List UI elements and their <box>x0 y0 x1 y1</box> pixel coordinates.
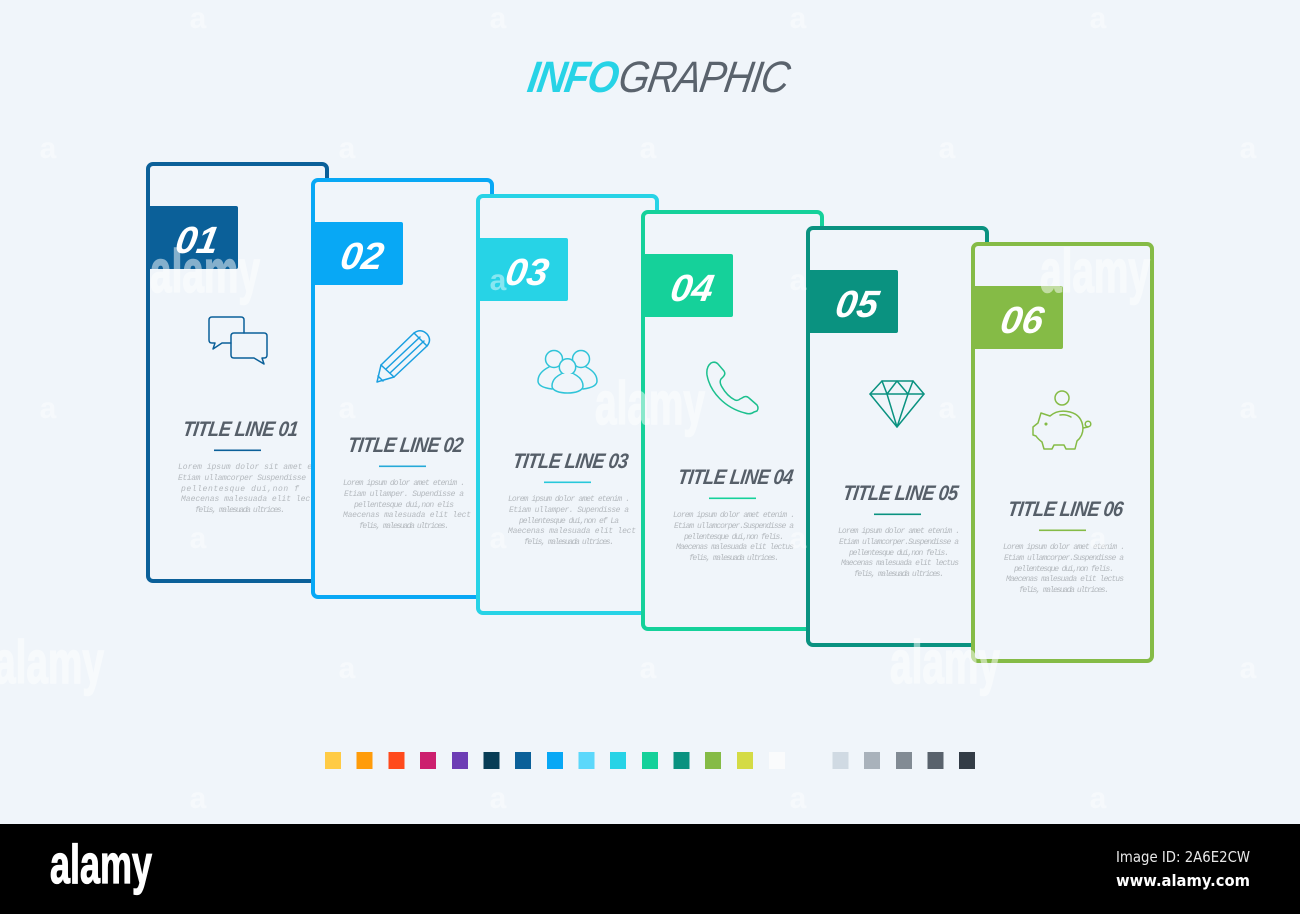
body text 04: pellentesque dui,non felis. <box>683 533 784 542</box>
watermarks: alamy <box>1040 238 1150 305</box>
number badge 04: 04 <box>667 267 717 310</box>
body text 06: felis, malesuada ultrices. <box>1019 586 1109 595</box>
panel: card 06 <box>971 244 1152 661</box>
body text 02: pellentesque dui,non elis <box>353 501 454 510</box>
divider 03 <box>544 482 591 483</box>
number badge 06 <box>971 286 1063 349</box>
icon: piggy bank <box>1033 391 1091 449</box>
watermarks: a <box>1240 392 1257 425</box>
colour palette swatches <box>325 752 975 769</box>
heading: title line 05: TITLE LINE 05 <box>841 482 961 505</box>
icon: pencil <box>377 331 430 382</box>
watermarks: alamy <box>150 238 260 305</box>
body text 05: Lorem ipsum dolor amet etenim . <box>838 527 960 536</box>
number badge 05: 05 <box>832 283 883 326</box>
watermarks: a <box>339 392 356 425</box>
heading: title line 01: TITLE LINE 01 <box>181 418 299 441</box>
watermarks: a <box>190 522 207 555</box>
watermarks: a <box>790 782 807 815</box>
body text 03: felis, malesuada ultrices. <box>524 538 614 547</box>
body text 01: felis, malesuada ultrices. <box>195 506 285 515</box>
number badge 01 <box>146 206 238 269</box>
body text 03: Lorem ipsum dolor amet etenim . <box>508 495 630 504</box>
divider 02 <box>379 466 426 467</box>
number badge 01: 01 <box>172 219 222 262</box>
watermarks: a <box>40 132 57 165</box>
panel: card 02 <box>311 180 492 597</box>
icon: diamond <box>870 381 924 427</box>
divider 04 <box>709 498 756 499</box>
watermarks: a <box>490 522 507 555</box>
panel: card 05 <box>806 228 987 645</box>
body text 02 <box>343 479 471 531</box>
title <box>525 52 794 101</box>
watermarks: a <box>640 132 657 165</box>
watermarks: a <box>40 392 57 425</box>
title: GRAPHIC <box>616 52 794 101</box>
body text 02: Etiam ullamper. Supendisse a <box>344 490 464 499</box>
watermarks: alamy <box>595 370 705 437</box>
body text 04 <box>673 511 795 563</box>
body text 05: Etiam ullamcorper.Suspendisse a <box>839 538 959 547</box>
number badge 02 <box>311 222 403 285</box>
body text 05 <box>838 527 960 579</box>
watermarks: a <box>190 782 207 815</box>
panel: card 04 <box>641 212 822 629</box>
body text 02: felis, malesuada ultrices. <box>359 522 449 531</box>
watermarks: a <box>339 132 356 165</box>
body text 06: Maecenas malesuada elit lectus <box>1006 575 1124 584</box>
watermarks: a <box>640 652 657 685</box>
body text 05: pellentesque dui,non felis. <box>848 549 949 558</box>
watermarks: a <box>490 782 507 815</box>
watermarks: a <box>490 2 507 35</box>
watermarks: a <box>939 392 956 425</box>
body text 03: Etiam ullamper. Supendisse a <box>509 506 629 515</box>
divider 05 <box>874 514 921 515</box>
heading: title line 02: TITLE LINE 02 <box>346 434 465 457</box>
body text 06: Lorem ipsum dolor amet etenim . <box>1003 543 1125 552</box>
watermarks: a <box>939 132 956 165</box>
footer bar <box>0 824 1300 914</box>
image id: Image ID: 2A6E2CW <box>1116 848 1250 866</box>
watermarks: a <box>790 2 807 35</box>
icon: people <box>538 350 597 393</box>
panel: card 03 <box>476 196 657 613</box>
panel: card 01 <box>146 164 327 581</box>
watermarks: a <box>1240 652 1257 685</box>
body text 06 <box>1003 543 1125 595</box>
body text 03: pellentesque dui,non ef La <box>518 517 619 526</box>
body text 04: Lorem ipsum dolor amet etenim . <box>673 511 795 520</box>
watermarks: alamy <box>890 629 1000 696</box>
heading: title line 06: TITLE LINE 06 <box>1006 498 1126 521</box>
body text 01: Etiam ullamcorper Suspendisse <box>178 474 306 483</box>
footer logo: alamy <box>50 833 152 895</box>
number badge 05 <box>806 270 898 333</box>
body text 05: felis, malesuada ultrices. <box>854 570 944 579</box>
body text 01: pellentesque dui,non f <box>180 485 299 494</box>
icon: chat bubbles <box>209 317 267 364</box>
number badge 02: 02 <box>337 235 387 278</box>
body text 04: Etiam ullamcorper.Suspendisse a <box>674 522 794 531</box>
body text 03: Maecenas malesuada elit lect <box>508 527 636 536</box>
number badge 04 <box>641 254 733 317</box>
heading: title line 03: TITLE LINE 03 <box>511 450 630 473</box>
body text 01 <box>178 463 315 515</box>
title: INFO <box>525 52 623 101</box>
watermarks: a <box>1090 522 1107 555</box>
watermarks: a <box>1240 132 1257 165</box>
body text 02: Lorem ipsum dolor amet etenim . <box>343 479 465 488</box>
watermarks: a <box>1090 782 1107 815</box>
icon: phone <box>707 362 758 414</box>
divider 01 <box>214 450 261 451</box>
heading: title line 04: TITLE LINE 04 <box>676 466 795 489</box>
body text 04: Maecenas malesuada elit lectus <box>676 543 794 552</box>
website: www.alamy.com <box>1116 871 1250 890</box>
watermarks: a <box>339 652 356 685</box>
watermarks: a <box>490 264 507 297</box>
body text 03 <box>508 495 636 547</box>
number badge 06: 06 <box>997 299 1048 342</box>
watermarks: a <box>190 2 207 35</box>
watermarks: a <box>1090 2 1107 35</box>
body text 01: Lorem ipsum dolor sit amet e <box>178 463 312 472</box>
body text 04: felis, malesuada ultrices. <box>689 554 779 563</box>
body text 01: Maecenas malesuada elit lect <box>181 495 315 504</box>
body text 02: Maecenas malesuada elit lect <box>343 511 471 520</box>
watermarks: a <box>790 522 807 555</box>
watermarks: a <box>790 264 807 297</box>
body text 06: pellentesque dui,non felis. <box>1013 565 1114 574</box>
body text 05: Maecenas malesuada elit lectus <box>841 559 959 568</box>
body text 06: Etiam ullamcorper.Suspendisse a <box>1004 554 1124 563</box>
divider 06 <box>1039 530 1086 531</box>
number badge 03 <box>476 238 568 301</box>
number badge 03: 03 <box>502 251 552 294</box>
